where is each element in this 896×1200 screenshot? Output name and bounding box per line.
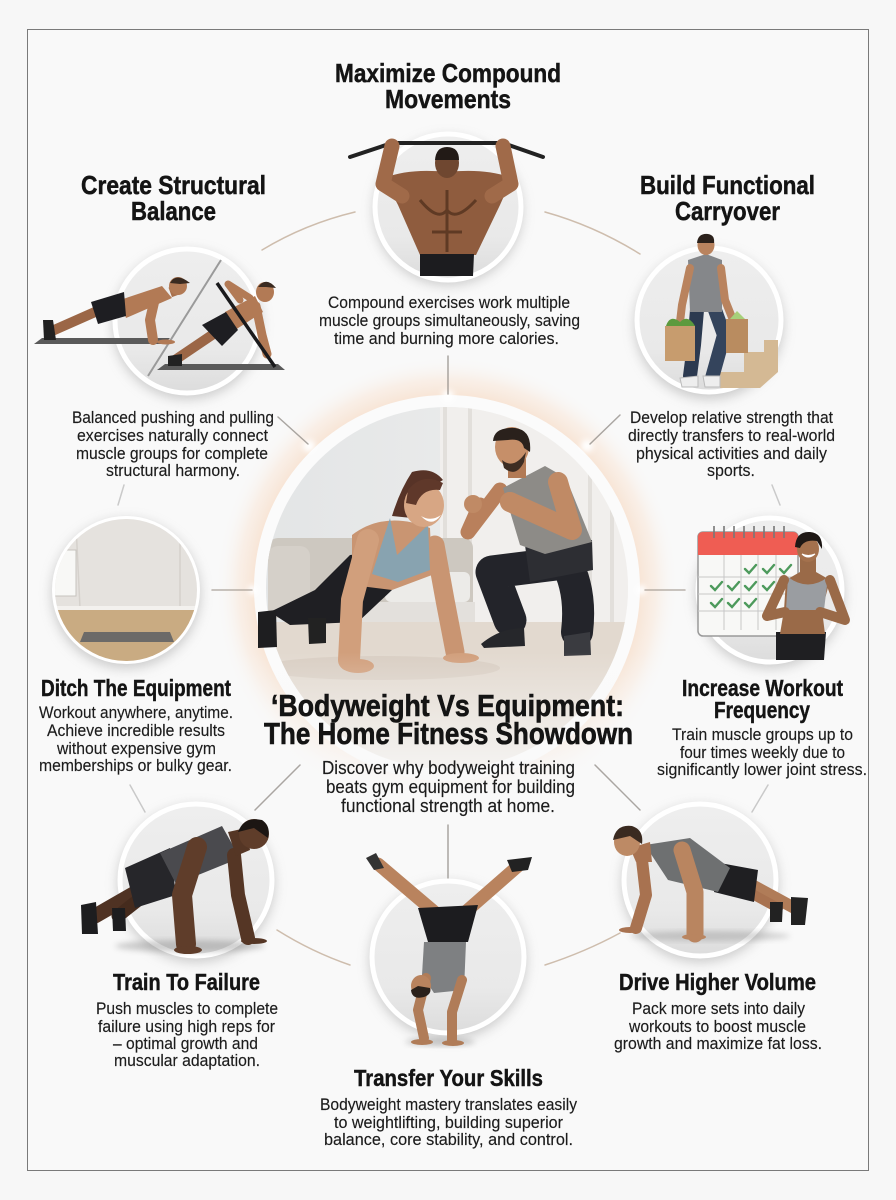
near arm xyxy=(349,540,368,660)
stairs xyxy=(720,340,778,388)
description: without expensive gym xyxy=(56,740,216,758)
heading: Frequency xyxy=(714,697,810,723)
description: Bodyweight mastery translates easily xyxy=(320,1096,578,1114)
description: significantly lower joint stress. xyxy=(657,761,867,779)
subtitle xyxy=(322,758,575,816)
arms xyxy=(680,268,690,322)
panel: maximize compound movements xyxy=(319,58,580,348)
heading xyxy=(81,170,266,226)
grocery bags xyxy=(665,326,695,361)
description: – optimal growth and xyxy=(113,1035,258,1053)
front arm xyxy=(510,482,572,530)
heading xyxy=(682,675,843,723)
heading: Ditch The Equipment xyxy=(41,675,231,701)
pants xyxy=(492,562,572,620)
description: workouts to boost muscle xyxy=(628,1018,806,1036)
panel: train to failure xyxy=(81,804,278,1070)
description xyxy=(320,1096,578,1149)
icon: plank and side plank with bar xyxy=(34,277,285,370)
neck and head xyxy=(508,458,526,478)
heading xyxy=(335,58,561,114)
icon: smiling woman xyxy=(767,532,845,660)
heading: Maximize Compound xyxy=(335,58,561,88)
hair and ponytail xyxy=(392,470,443,518)
peach glow xyxy=(215,356,679,820)
description xyxy=(628,409,835,480)
leggings xyxy=(270,550,397,625)
living room scene xyxy=(260,400,640,782)
disc xyxy=(370,881,526,1039)
disc xyxy=(52,516,200,668)
panel: transfer your skills xyxy=(320,853,578,1149)
disc xyxy=(635,248,783,399)
white ring xyxy=(254,395,640,781)
central photo: two people exercising xyxy=(231,372,664,766)
plank man xyxy=(52,312,95,331)
description: growth and maximize fat loss. xyxy=(614,1035,822,1053)
description: failure using high reps for xyxy=(98,1018,275,1036)
description: exercises naturally connect xyxy=(77,427,268,445)
disc xyxy=(113,249,261,399)
description: Train muscle groups up to xyxy=(672,726,853,744)
description xyxy=(39,704,233,775)
head xyxy=(698,235,714,255)
panel: drive higher volume xyxy=(613,804,822,1053)
hands xyxy=(464,495,482,513)
legs xyxy=(690,310,697,376)
panel: build functional carryover xyxy=(628,170,835,480)
disc xyxy=(622,804,778,962)
description xyxy=(72,409,274,480)
description: muscle groups for complete xyxy=(76,445,268,463)
description: four times weekly due to xyxy=(680,744,845,762)
description: Workout anywhere, anytime. xyxy=(39,704,233,722)
description xyxy=(657,726,867,779)
sports bra xyxy=(372,518,430,582)
main title xyxy=(264,688,633,751)
description: physical activities and daily xyxy=(636,445,828,463)
description: Develop relative strength that xyxy=(630,409,833,427)
icon: man in push-up facing left xyxy=(613,826,808,941)
description xyxy=(614,1000,822,1053)
description: Compound exercises work multiple xyxy=(328,294,570,312)
torso xyxy=(352,520,432,590)
shoes xyxy=(481,628,525,648)
heading: Balance xyxy=(131,196,216,226)
side plank man xyxy=(175,335,212,360)
icon: calendar with checks xyxy=(698,526,798,636)
subtitle: functional strength at home. xyxy=(341,796,555,816)
tank top xyxy=(503,466,592,554)
far arm xyxy=(435,545,455,652)
description xyxy=(319,294,580,348)
description: Pack more sets into daily xyxy=(632,1000,806,1018)
description: to weightlifting, building superior xyxy=(334,1114,563,1132)
panel: create structural balance xyxy=(34,170,285,480)
heading: Drive Higher Volume xyxy=(619,969,816,995)
main title: ‘Bodyweight Vs Equipment: xyxy=(271,688,624,723)
description: muscular adaptation. xyxy=(114,1052,260,1070)
description: Balanced pushing and pulling xyxy=(72,409,274,427)
shoes xyxy=(258,610,277,648)
subtitle: Discover why bodyweight training xyxy=(322,758,575,778)
heading: Increase Workout xyxy=(682,675,843,701)
description: Achieve incredible results xyxy=(47,722,225,740)
icon: man carrying groceries up stairs xyxy=(665,234,778,388)
heading: Create Structural xyxy=(81,170,266,200)
man squatting xyxy=(464,427,593,656)
connector lines between circles xyxy=(118,212,780,965)
disc xyxy=(696,518,844,668)
heading: Train To Failure xyxy=(113,969,260,995)
description: memberships or bulky gear. xyxy=(39,757,232,775)
subtitle: beats gym equipment for building xyxy=(326,777,575,797)
mats xyxy=(34,338,170,344)
woman in push-up xyxy=(258,470,479,673)
heading: Movements xyxy=(385,84,511,114)
back arm xyxy=(468,490,500,532)
hands xyxy=(342,659,374,673)
description: directly transfers to real-world xyxy=(628,427,835,445)
disc xyxy=(374,134,522,285)
heading: Build Functional xyxy=(640,170,815,200)
heading xyxy=(640,170,815,226)
description: structural harmony. xyxy=(106,462,240,480)
shirt xyxy=(688,254,722,312)
disc xyxy=(118,804,274,962)
description: Push muscles to complete xyxy=(96,1000,278,1018)
icon: man in handstand xyxy=(366,853,532,1046)
description: sports. xyxy=(707,462,755,480)
heading: Carryover xyxy=(675,196,780,226)
panel: increase workout frequency xyxy=(657,518,867,779)
main title: The Home Fitness Showdown xyxy=(264,716,633,751)
heading: Transfer Your Skills xyxy=(354,1065,543,1091)
description: time and burning more calories. xyxy=(334,330,559,348)
bottom fade into page xyxy=(205,652,689,842)
icon: man doing pull-up xyxy=(350,143,543,276)
icon: empty room with mat xyxy=(55,519,197,661)
description: balance, core stability, and control. xyxy=(324,1131,573,1149)
icon: man in push-up xyxy=(81,819,269,954)
description xyxy=(96,1000,278,1070)
panel: ditch the equipment xyxy=(39,515,233,775)
shoes xyxy=(680,376,698,387)
head xyxy=(404,483,444,527)
ring highlights xyxy=(248,390,646,595)
description: muscle groups simultaneously, saving xyxy=(319,312,580,330)
